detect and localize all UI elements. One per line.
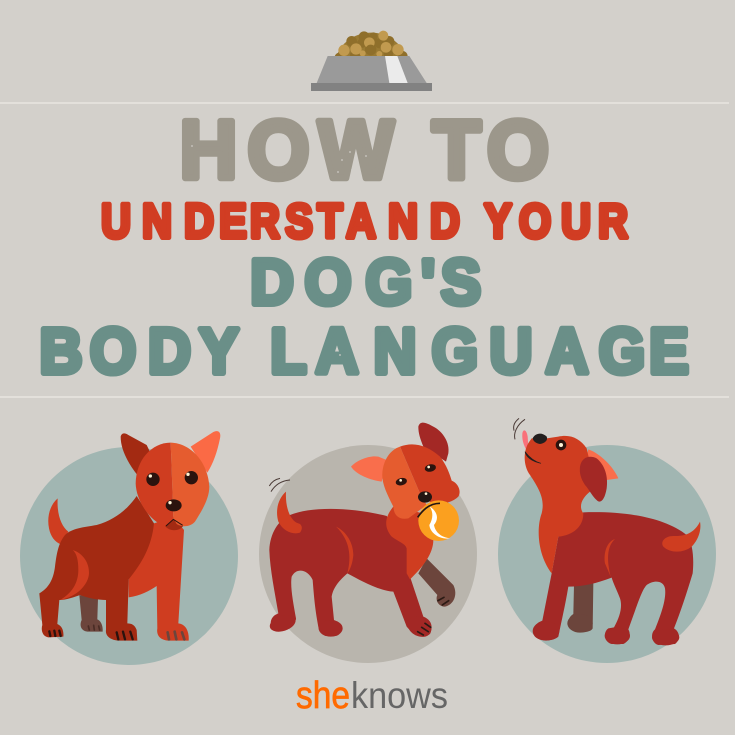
icon: food bowl with kibble: [311, 31, 432, 91]
title: body language: BODY LANGUAGE: [40, 316, 689, 387]
illustration: dog with tennis ball in grey circle: [259, 423, 477, 663]
title: understand your: UNDERSTAND YOUR: [101, 195, 628, 248]
illustration: standing dog in teal circle: [20, 431, 238, 665]
logo: sheknows: [296, 675, 448, 717]
title: dog's: DOG'S: [250, 247, 481, 318]
logo: sheknows: knows: [351, 675, 448, 716]
title: how to: HOW TO: [180, 104, 549, 196]
logo: sheknows: she: [296, 675, 350, 717]
illustration: dog looking up in teal circle: [498, 418, 716, 663]
